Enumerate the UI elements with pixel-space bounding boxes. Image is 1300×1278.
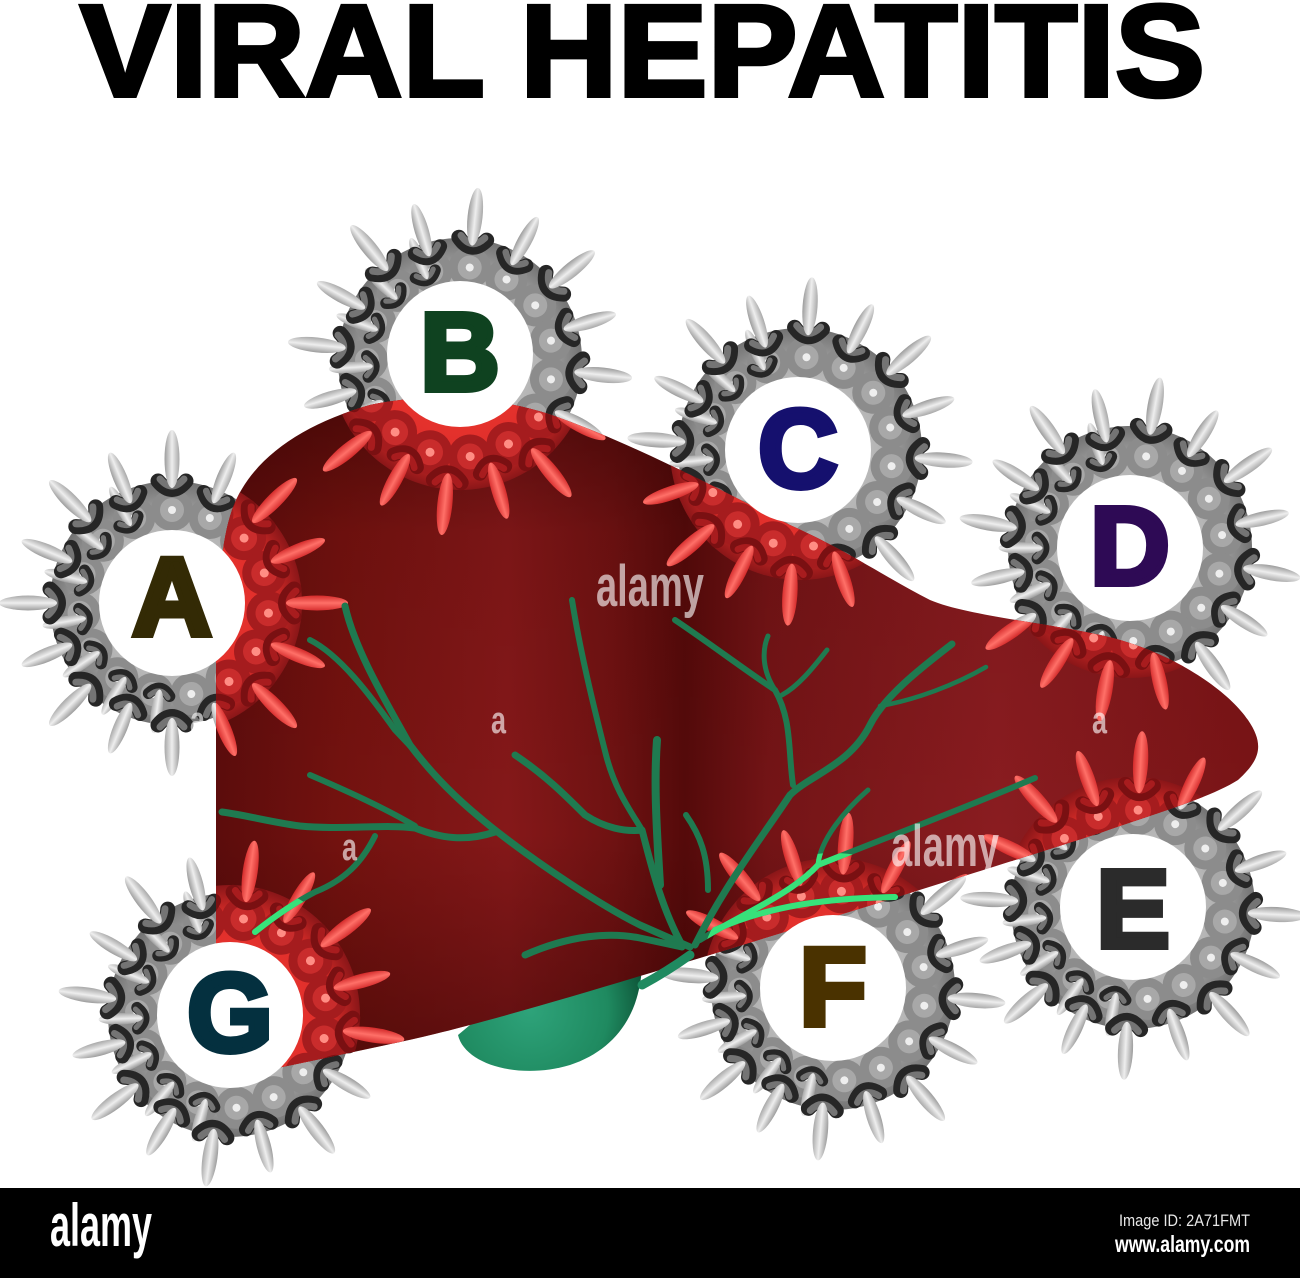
footer logo: alamy: [50, 1192, 152, 1259]
viruses, red parts inside the liver: [105, 380, 1206, 1068]
bile ducts highlighted over viruses: [252, 853, 898, 940]
watermarks: a: [491, 700, 507, 742]
virus E label: E: [1096, 848, 1170, 971]
watermarks: [190, 554, 1108, 879]
bile ducts: [222, 600, 1035, 955]
virus B label: B: [420, 291, 500, 414]
watermarks: a: [190, 700, 206, 742]
watermarks: alamy: [596, 554, 704, 619]
virus G label: [157, 942, 303, 1088]
virus E label: [1060, 834, 1206, 980]
virus A label: [99, 530, 245, 676]
footer bar: [0, 1188, 1300, 1278]
virus F label: [760, 915, 906, 1061]
watermarks: alamy: [891, 814, 999, 879]
virus F label: F: [799, 926, 867, 1049]
virus D label: [1057, 475, 1203, 621]
gallbladder neck: [642, 955, 690, 985]
gallbladder: [458, 965, 642, 1071]
virus C label: C: [758, 388, 838, 511]
liver: [216, 398, 1258, 1080]
virus A label: A: [132, 536, 212, 659]
footer image id: Image ID: 2A71FMT: [1119, 1211, 1250, 1230]
virus B label: [387, 281, 533, 427]
watermarks: a: [1092, 700, 1108, 742]
virus G label: G: [187, 952, 273, 1075]
virus D label: D: [1090, 485, 1170, 608]
virus C label: [725, 377, 871, 523]
watermarks: a: [342, 827, 358, 869]
footer url: www.alamy.com: [1114, 1231, 1250, 1257]
